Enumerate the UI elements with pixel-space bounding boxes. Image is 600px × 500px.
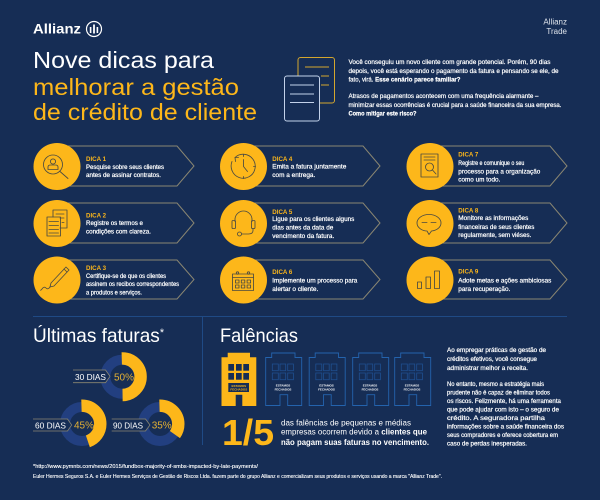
icon: closed building blue 2: FECHADOS [318,388,335,392]
icon: calendar [232,272,254,290]
intro text: minimizar essas ocorrências é crucial para a saúde financeira da sua empresa. [348,102,562,109]
tip text: processo para a organização [458,168,541,175]
right text block [447,347,565,448]
chart: 60 dias 45%: 45% [74,420,94,432]
tip text: Monitore as informações [458,215,528,222]
title: de crédito de cliente [33,99,257,125]
tip text: com a entrega. [272,172,316,179]
chart: 90 dias 35%: 35% [152,420,172,432]
tip text: para recuperação. [458,286,511,293]
intro text: Como mitigar este risco? [348,110,416,118]
tip text: DICA 4 [272,156,293,163]
footnotes [33,464,442,480]
intro text: Você conseguiu um novo cliente com grande potencial. Porém, 90 dias [348,59,551,66]
statistic text: das falências de pequenas e médias [281,418,411,428]
tip text: condições com clareza. [86,228,151,236]
tip text: DICA 2 [86,213,106,220]
icon: closed building blue 4: ESTAMOS [405,384,419,388]
tip text [86,156,164,179]
icon: documents [284,58,334,121]
logo: Allianz [33,22,102,36]
icon: closed building blue 3: ESTAMOS [363,384,377,388]
tip text: Ligue para os clientes alguns [272,216,354,223]
icon: closed building blue 3: FECHADOS [362,388,378,392]
icon: closed building blue 2: ESTAMOS [319,384,334,388]
tip text: vencimento da fatura. [272,233,335,240]
chart: 30 dias 50%: 50% [114,371,134,383]
heading: Últimas faturas: Últimas faturas [33,325,163,347]
chart: 30 dias 50% [73,358,141,395]
tip text: DICA 7 [458,152,479,159]
tip text: Registre e comunique o seu [458,160,525,167]
chart: 90 dias 35% [112,406,178,442]
tip text: assinem os recibos correspondentes [86,281,179,288]
panel: dica 5 [220,200,380,247]
icon: closed building blue 3 [353,353,389,406]
tip text: DICA 8 [458,207,479,214]
right text block: caso de perdas inesperadas. [447,440,527,448]
brand: Allianz Trade [543,18,568,36]
brand: Allianz Trade: Trade [546,27,568,36]
statistic text: não pagam suas faturas no vencimento. [281,438,429,447]
icon: pen [41,267,69,290]
tip text [86,265,179,296]
tip text: Certifique-se de que os clientes [86,273,166,280]
right text block: crédito. A seguradora partilha [447,415,545,422]
tip text [86,213,151,236]
tip text [458,152,541,183]
heading: Últimas faturas: * [160,327,165,339]
right text block: Ao empregar práticas de gestão de [447,347,546,354]
icon: closed building blue 1 [266,353,302,406]
tip text: Emita a fatura juntamente [272,164,347,170]
tip text [272,156,347,179]
tip text: DICA 5 [272,209,293,216]
right text block: administrar melhor a receita. [447,365,528,372]
right text block: créditos efetivos, você consegue [447,356,537,363]
intro text: Atrasos de pagamentos acontecem com uma frequência alarmante – [348,93,539,100]
statistic: 1/5: 1/5 [222,412,274,453]
panel: dica 2 [34,200,194,247]
chart: 60 dias 45%: 60 DIAS [35,420,66,430]
intro text: depois, você está esperando o pagamento da fatura e pensando se ele, de [348,68,559,75]
icon: closed building blue 2 [309,353,345,406]
panel: dica 4 [220,143,380,190]
tip text: antes de assinar contratos. [86,172,161,179]
panel: dica 8 [406,200,567,247]
brand: Allianz Trade: Allianz [543,18,567,26]
chart: 90 dias 35%: 90 DIAS [113,420,143,430]
icon: documents [47,210,67,236]
tip text: Pesquise sobre seus clientes [86,164,164,171]
icon: closed building blue 1: FECHADOS [275,388,291,392]
icon: clock [231,154,256,178]
tip text [458,269,551,293]
tip text: DICA 3 [86,265,106,272]
tip text: Implemente um processo para [272,277,358,284]
icon: closed building yellow [222,353,256,406]
icon: report with magnifier [421,154,438,177]
panel: dica 1 [34,143,194,190]
statistic text [281,418,429,447]
statistic text: empresas ocorrem devido a clientes que [281,428,428,436]
intro text: fato, virá. Esse cenário parece familiar? [348,76,460,84]
title [33,47,257,125]
panel: dica 3 [34,256,194,304]
tip text: DICA 6 [272,269,293,276]
icon: magnifier with person [44,155,68,178]
tip text [458,207,534,239]
heading: Falências: Falências [220,325,298,347]
chart: 30 dias 50%: 30 DIAS [75,372,106,382]
tip text [272,269,358,293]
tip text: dias antes da data de [272,224,334,232]
icon: closed building yellow: ESTAMOS [231,384,246,388]
tip text: DICA 1 [86,156,106,163]
icon: closed building yellow: FECHADOS [230,388,247,392]
right text block: No entanto, mesmo a estratégia mais [447,381,545,388]
chart: 60 dias 45% [33,406,100,442]
footnotes: *http://www.pymnts.com/news/2015/fundbox-majority-of-smbs-impacted-by-late-payments/ [33,464,259,470]
tip text: como um todo. [458,176,501,183]
tip text: Registre os termos e [86,220,144,227]
tip text: Adote metas e ações ambiciosas [458,277,551,284]
footnotes: Euler Hermes Seguros S.A. e Euler Hermes Serviços de Gestão de Riscos Ltda. fazem parte do grupo Allianz e comercializam seus produtos e serviços usando a marca "Allianz Trade". [33,474,442,480]
right text block: informações sobre a saúde financeira dos [447,424,565,430]
right text block: seus compradores e oferece cobertura em [447,432,558,439]
tip text: DICA 9 [458,269,479,276]
tip text: financeiras de seus clientes [458,224,534,231]
icon: bar chart [418,271,440,288]
logo: Allianz: Allianz [33,22,81,36]
tip text [272,209,354,240]
panel: dica 7 [406,143,567,190]
intro text [348,59,562,118]
icon: headset [232,211,255,236]
icon: speech bubble [417,214,441,234]
panel: dica 6 [220,256,380,304]
right text block: os riscos. Felizmente, há uma ferramenta [447,398,561,405]
title: Nove dicas para [33,47,215,73]
tip text: alertar o cliente. [272,286,319,293]
icon: closed building blue 1: ESTAMOS [276,384,290,388]
panel: dica 9 [406,256,567,304]
right text block: prudente não é capaz de eliminar todos [447,390,551,396]
icon: closed building blue 4: FECHADOS [404,388,420,392]
tip text: a produtos e serviços. [86,289,142,296]
tip text: regularmente, sem viéses. [458,232,532,239]
icon: closed building blue 4 [395,353,431,406]
title: melhorar a gestão [33,74,239,100]
right text block: que pode ajudar com isto – o seguro de [447,406,559,414]
